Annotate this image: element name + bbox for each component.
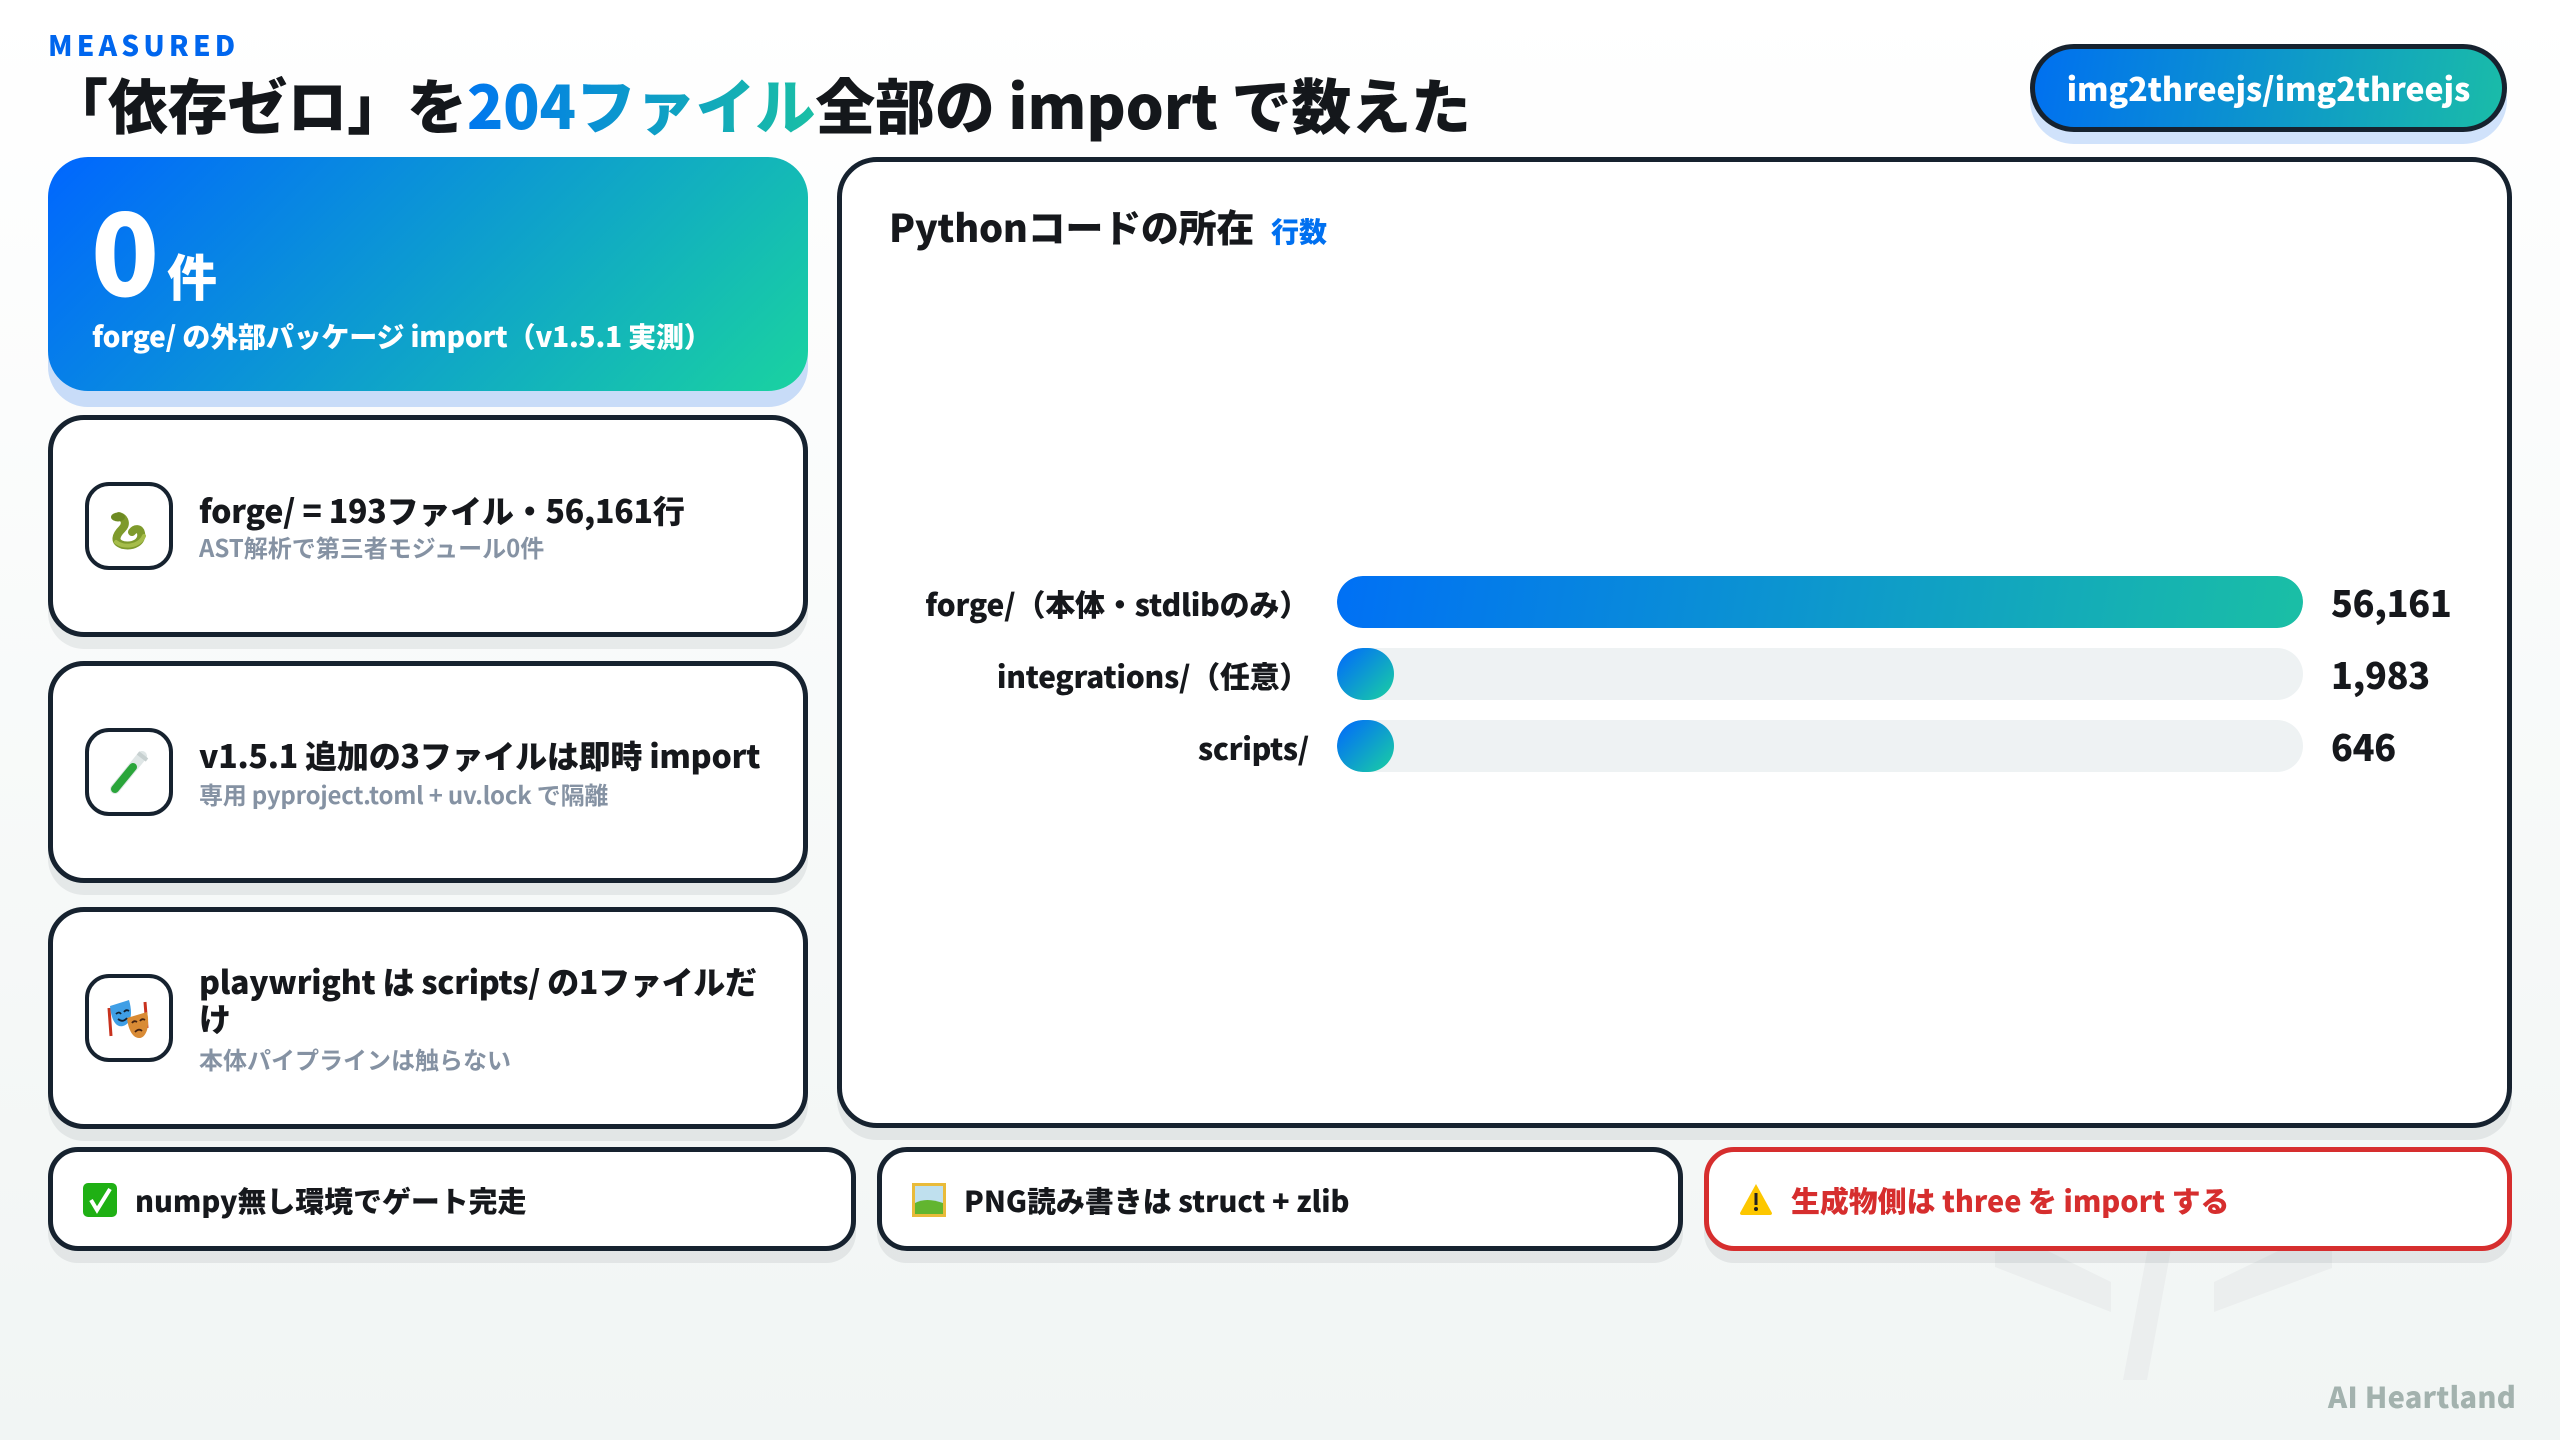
bar track: scripts — [1337, 720, 2303, 772]
icon: theater masks — [85, 974, 173, 1062]
chart unit: 行数 — [1271, 211, 1327, 251]
card title — [199, 958, 757, 1041]
strip: numpy — [48, 1147, 856, 1251]
strip text: 生成物側は three を import する — [1791, 1179, 2229, 1221]
card title: v1.5.1 追加の3ファイルは即時 import — [199, 732, 760, 778]
hero number: 0 — [91, 167, 159, 329]
icon: warning — [1740, 1184, 1772, 1215]
watermark: code symbol — [1996, 1263, 2332, 1294]
hero caption: forge/ の外部パッケージ import（v1.5.1 実測） — [92, 316, 712, 356]
card subtitle: 専用 pyproject.toml + uv.lock で隔離 — [199, 776, 608, 811]
bar chart — [925, 576, 2451, 772]
panel: python code location — [837, 157, 2512, 1128]
strip text: PNG読み書きは struct + zlib — [964, 1179, 1350, 1221]
bar track: forge — [1337, 576, 2303, 628]
hero panel: zero count — [48, 157, 808, 391]
icon: framed picture — [912, 1183, 946, 1217]
title: 「依存ゼロ」を204ファイル全部の import で数えた — [48, 60, 1471, 147]
bar: integrations — [997, 648, 2430, 700]
bar: forge — [925, 576, 2451, 628]
chart heading: Pythonコードの所在 — [889, 198, 1254, 253]
strip: warning — [1704, 1147, 2512, 1251]
card subtitle: AST解析で第三者モジュール0件 — [199, 529, 544, 564]
hero unit: 件 — [167, 239, 217, 311]
repo badge — [2030, 44, 2507, 132]
card title: forge/ = 193ファイル・56,161行 — [199, 487, 685, 533]
bar label: forge: forge/（本体・stdlibのみ） — [925, 581, 1309, 625]
panel: forge files — [48, 415, 808, 637]
icon: snake — [85, 482, 173, 570]
card title: け — [199, 995, 231, 1041]
strip text: numpy無し環境でゲート完走 — [135, 1179, 526, 1221]
card title: playwright は scripts/ の1ファイルだ — [199, 958, 757, 1004]
bar track: integrations — [1337, 648, 2303, 700]
bar: scripts — [1198, 720, 2396, 772]
panel: new files — [48, 661, 808, 883]
brand credit: AI Heartland — [2328, 1375, 2516, 1417]
bar value: integrations: 1,983 — [2331, 648, 2430, 700]
bar value: scripts: 646 — [2331, 720, 2396, 772]
eyebrow label: MEASURED — [48, 25, 239, 65]
icon: check mark — [83, 1183, 117, 1217]
repo badge: img2threejs/img2threejs — [2067, 65, 2470, 111]
bar value: forge: 56,161 — [2331, 576, 2451, 628]
panel: playwright — [48, 907, 808, 1129]
strip: png — [877, 1147, 1683, 1251]
bar label: integrations: integrations/（任意） — [997, 653, 1309, 697]
card subtitle: 本体パイプラインは触らない — [199, 1041, 511, 1076]
icon: test tube — [85, 728, 173, 816]
bar label: scripts: scripts/ — [1198, 725, 1309, 769]
